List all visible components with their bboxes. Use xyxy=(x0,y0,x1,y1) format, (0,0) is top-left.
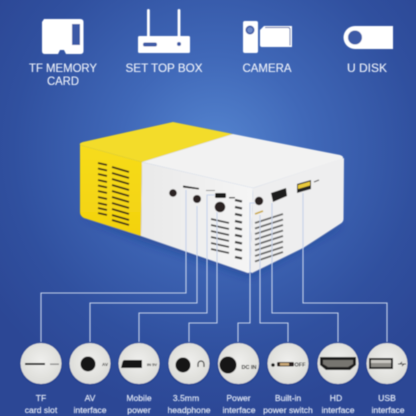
line: USB interface xyxy=(303,193,387,342)
right side ports xyxy=(255,180,319,214)
callout: AV interface xyxy=(68,342,112,415)
bottom row: port callouts xyxy=(20,342,408,415)
callout: 3.5mm headphone: 3.5mm xyxy=(173,393,199,403)
icon: TF card window xyxy=(72,24,80,45)
callout: AV interface: interface xyxy=(74,405,107,415)
callout: HD interface xyxy=(316,342,360,415)
yellow side vents xyxy=(98,163,129,225)
icon: TF memory card xyxy=(42,19,84,54)
callout: AV interface: AV xyxy=(102,362,108,367)
white right side xyxy=(250,158,344,273)
line: mobile power xyxy=(139,195,215,342)
callout: USB interface xyxy=(366,342,408,415)
callout: built-in power switch: Built-in xyxy=(275,393,301,403)
icon: U disk xyxy=(344,26,393,49)
label: U disk: U DISK xyxy=(347,61,387,75)
top row: compatible devices xyxy=(29,9,393,88)
callout: TF card slot: card slot xyxy=(25,405,58,415)
right side vents xyxy=(255,214,283,262)
label: TF memory card: TF MEMORY xyxy=(29,61,97,75)
front ports xyxy=(169,186,235,212)
callout: TF card slot: TF xyxy=(36,393,46,403)
front vents xyxy=(211,219,229,253)
label: set top box: SET TOP BOX xyxy=(126,61,202,75)
label: camera: CAMERA xyxy=(242,61,292,75)
side column vents xyxy=(235,200,242,258)
callout: 3.5mm headphone: headphone xyxy=(167,405,211,415)
callout: USB interface: interface xyxy=(372,405,405,415)
callout: built-in power switch xyxy=(263,342,313,415)
callout: mobile power: power xyxy=(127,405,151,415)
yellow top xyxy=(80,122,233,162)
line: TF card slot xyxy=(41,190,186,342)
icon: camera xyxy=(243,21,292,53)
projector xyxy=(80,122,344,276)
callout: 3.5mm headphone xyxy=(167,342,211,415)
device shadow xyxy=(80,215,344,276)
icon: set top box xyxy=(138,9,190,53)
callout: power interface: Power xyxy=(226,393,251,403)
line: power switch xyxy=(260,215,288,342)
callout: AV interface: AV xyxy=(85,393,96,403)
callout: built-in power switch: power switch xyxy=(263,405,313,415)
callout: TF card slot xyxy=(20,342,62,415)
white front xyxy=(141,162,253,273)
callout: mobile power xyxy=(118,342,160,415)
line: headphone xyxy=(189,212,217,342)
white top xyxy=(142,134,343,188)
label: card: CARD xyxy=(47,74,79,88)
line: power interface xyxy=(238,203,255,342)
callout: power interface: interface xyxy=(223,405,256,415)
line: AV interface xyxy=(90,206,197,342)
callout: mobile power: IN 5V xyxy=(147,362,157,367)
connector lines xyxy=(41,190,387,342)
callout: HD interface: HD xyxy=(330,393,342,403)
callout: power interface: DC IN xyxy=(242,365,257,371)
callout: mobile power: Mobile xyxy=(126,393,152,403)
line: HD interface xyxy=(272,203,338,342)
callout: HD interface: interface xyxy=(322,405,355,415)
callout: USB interface: USB xyxy=(378,393,396,403)
yellow side xyxy=(80,145,142,236)
callout: power interface xyxy=(217,342,260,415)
callout: built-in power switch: OFF xyxy=(294,362,306,368)
